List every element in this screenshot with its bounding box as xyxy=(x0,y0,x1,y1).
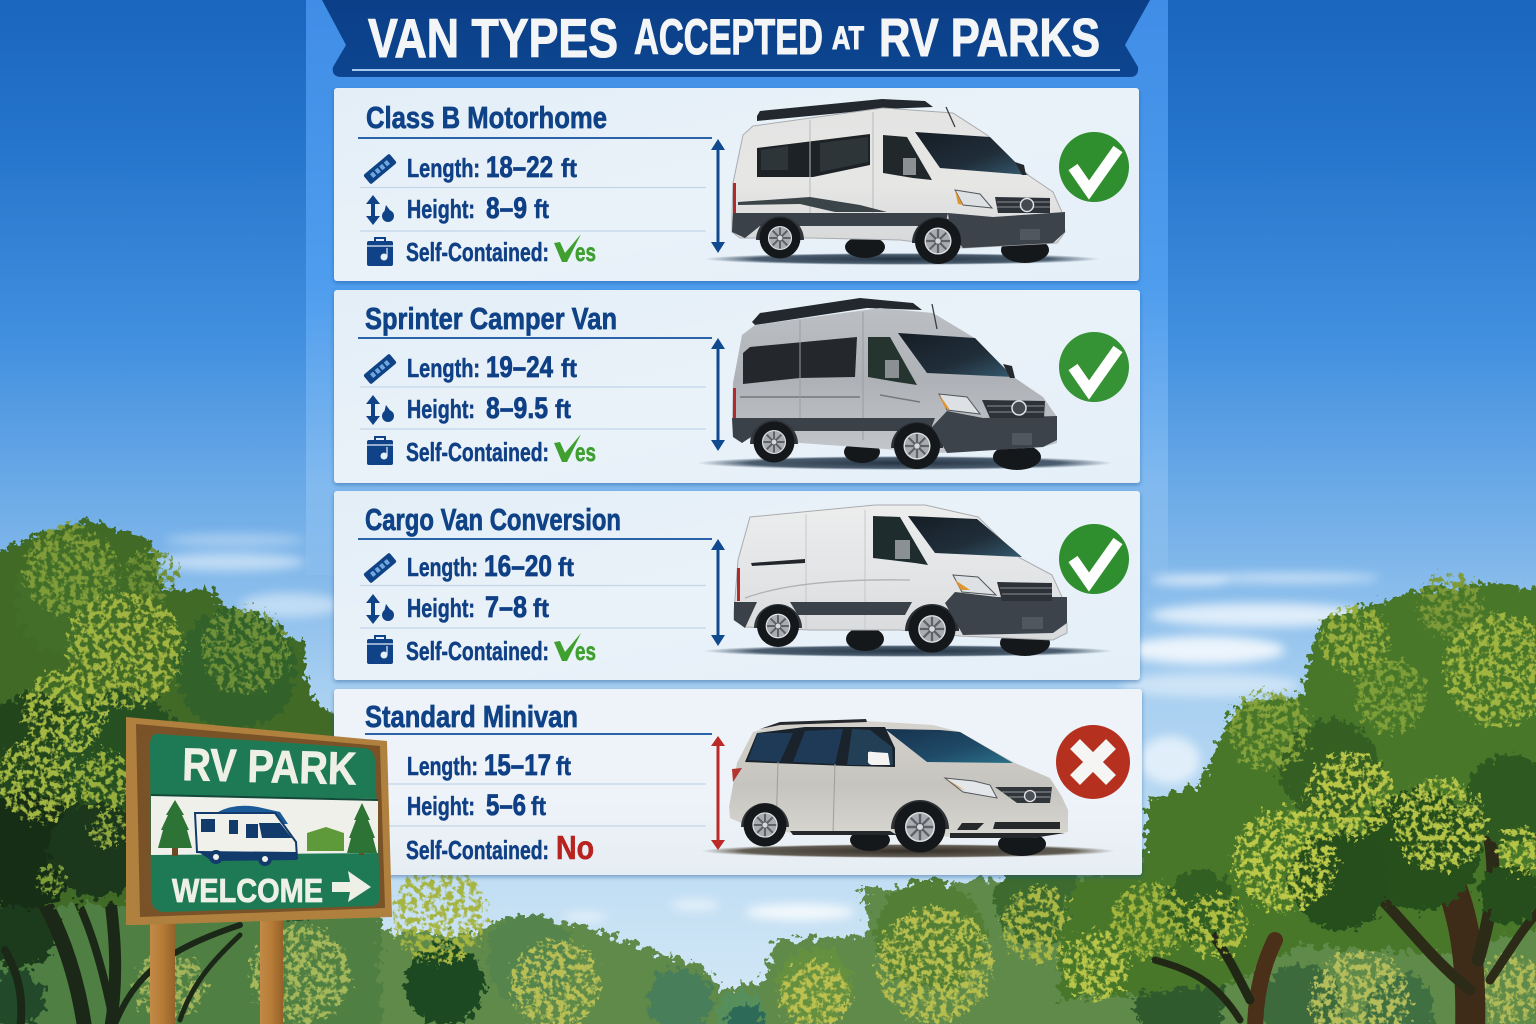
icon: height xyxy=(366,594,394,624)
length: 18–22 xyxy=(486,151,553,184)
length: ft xyxy=(561,353,577,383)
height arrow xyxy=(711,139,725,253)
van: sprinter xyxy=(697,298,1113,470)
icon: ruler xyxy=(363,552,397,584)
cross badge xyxy=(1056,725,1130,799)
icon: tank xyxy=(367,437,393,465)
trees: distant background forest xyxy=(0,850,1536,1024)
icon: ruler xyxy=(363,153,397,185)
height: 8–9.5 xyxy=(486,392,548,425)
heading: Class B Motorhome xyxy=(366,100,607,135)
check badge xyxy=(1059,332,1129,402)
length: 15–17 xyxy=(484,749,551,782)
self-contained yes: Self-Contained: xyxy=(406,636,549,666)
van: cargo xyxy=(703,505,1113,657)
icon: height xyxy=(366,195,394,225)
sign welcome: WELCOME xyxy=(172,872,323,909)
van: minivan xyxy=(701,719,1115,858)
length: Length: xyxy=(407,552,478,582)
self-contained yes: es xyxy=(575,636,596,666)
height xyxy=(407,789,546,822)
title banner xyxy=(322,0,1150,77)
sign trees xyxy=(158,800,377,856)
sign tent xyxy=(307,827,344,851)
self-contained yes: Self-Contained: xyxy=(406,237,549,267)
length: Length: xyxy=(407,751,478,781)
length: 16–20 xyxy=(484,550,552,583)
height arrow xyxy=(711,736,725,850)
heading: Sprinter Camper Van xyxy=(365,301,617,336)
height: ft xyxy=(531,791,546,821)
icon: ruler xyxy=(363,353,397,385)
height: Height: xyxy=(407,593,475,623)
length: 19–24 xyxy=(486,351,553,384)
length: ft xyxy=(561,153,577,183)
height xyxy=(407,392,571,425)
panel: Sprinter Camper Van xyxy=(334,290,1140,483)
self-contained yes: es xyxy=(575,237,596,267)
title text: ACCEPTED xyxy=(634,9,823,65)
title text: RV PARKS xyxy=(879,8,1100,68)
length: ft xyxy=(558,552,574,582)
sign arrow xyxy=(332,871,371,902)
sign: RV Park welcome xyxy=(126,717,392,1024)
length xyxy=(407,749,571,782)
height: ft xyxy=(533,593,549,623)
title text xyxy=(368,7,1100,69)
length: Length: xyxy=(407,153,480,183)
icon: tank xyxy=(367,238,393,266)
length xyxy=(407,550,574,583)
title text: AT xyxy=(832,20,864,56)
height arrow xyxy=(711,539,725,646)
height: Height: xyxy=(407,194,475,224)
clouds xyxy=(155,534,1380,921)
self-contained no: No xyxy=(556,829,594,866)
tree: left foreground xyxy=(0,520,340,1024)
icon: height xyxy=(366,395,394,425)
heading: Standard Minivan xyxy=(365,699,578,734)
height xyxy=(407,192,549,225)
panel: Standard Minivan xyxy=(334,689,1142,875)
panel: Cargo Van Conversion xyxy=(334,491,1140,680)
heading: Cargo Van Conversion xyxy=(365,502,621,537)
height: Height: xyxy=(407,394,475,424)
title text: VAN TYPES xyxy=(368,7,618,69)
tree: right foreground xyxy=(1060,573,1536,1024)
check badge xyxy=(1059,524,1129,594)
icon: tank xyxy=(367,636,393,664)
sign frame xyxy=(126,717,392,925)
height: ft xyxy=(534,194,549,224)
length xyxy=(407,351,577,384)
van: class B xyxy=(704,99,1100,265)
self-contained no: Self-Contained: xyxy=(406,835,549,865)
sign face xyxy=(150,734,380,912)
length xyxy=(407,151,577,184)
self-contained yes: es xyxy=(575,437,596,467)
sign motorhome xyxy=(195,806,297,866)
sign heading: RV PARK xyxy=(182,738,357,795)
length: Length: xyxy=(407,353,480,383)
self-contained yes: Self-Contained: xyxy=(406,437,549,467)
panel: Class B Motorhome xyxy=(334,88,1139,281)
sign posts xyxy=(150,918,283,1024)
check badge xyxy=(1059,132,1129,202)
height: ft xyxy=(555,394,571,424)
height: 5–6 xyxy=(486,789,526,822)
height: Height: xyxy=(407,791,475,821)
height xyxy=(407,591,549,624)
height: 7–8 xyxy=(485,591,527,624)
height: 8–9 xyxy=(486,192,527,225)
height arrow xyxy=(711,338,725,451)
length: ft xyxy=(556,751,571,781)
